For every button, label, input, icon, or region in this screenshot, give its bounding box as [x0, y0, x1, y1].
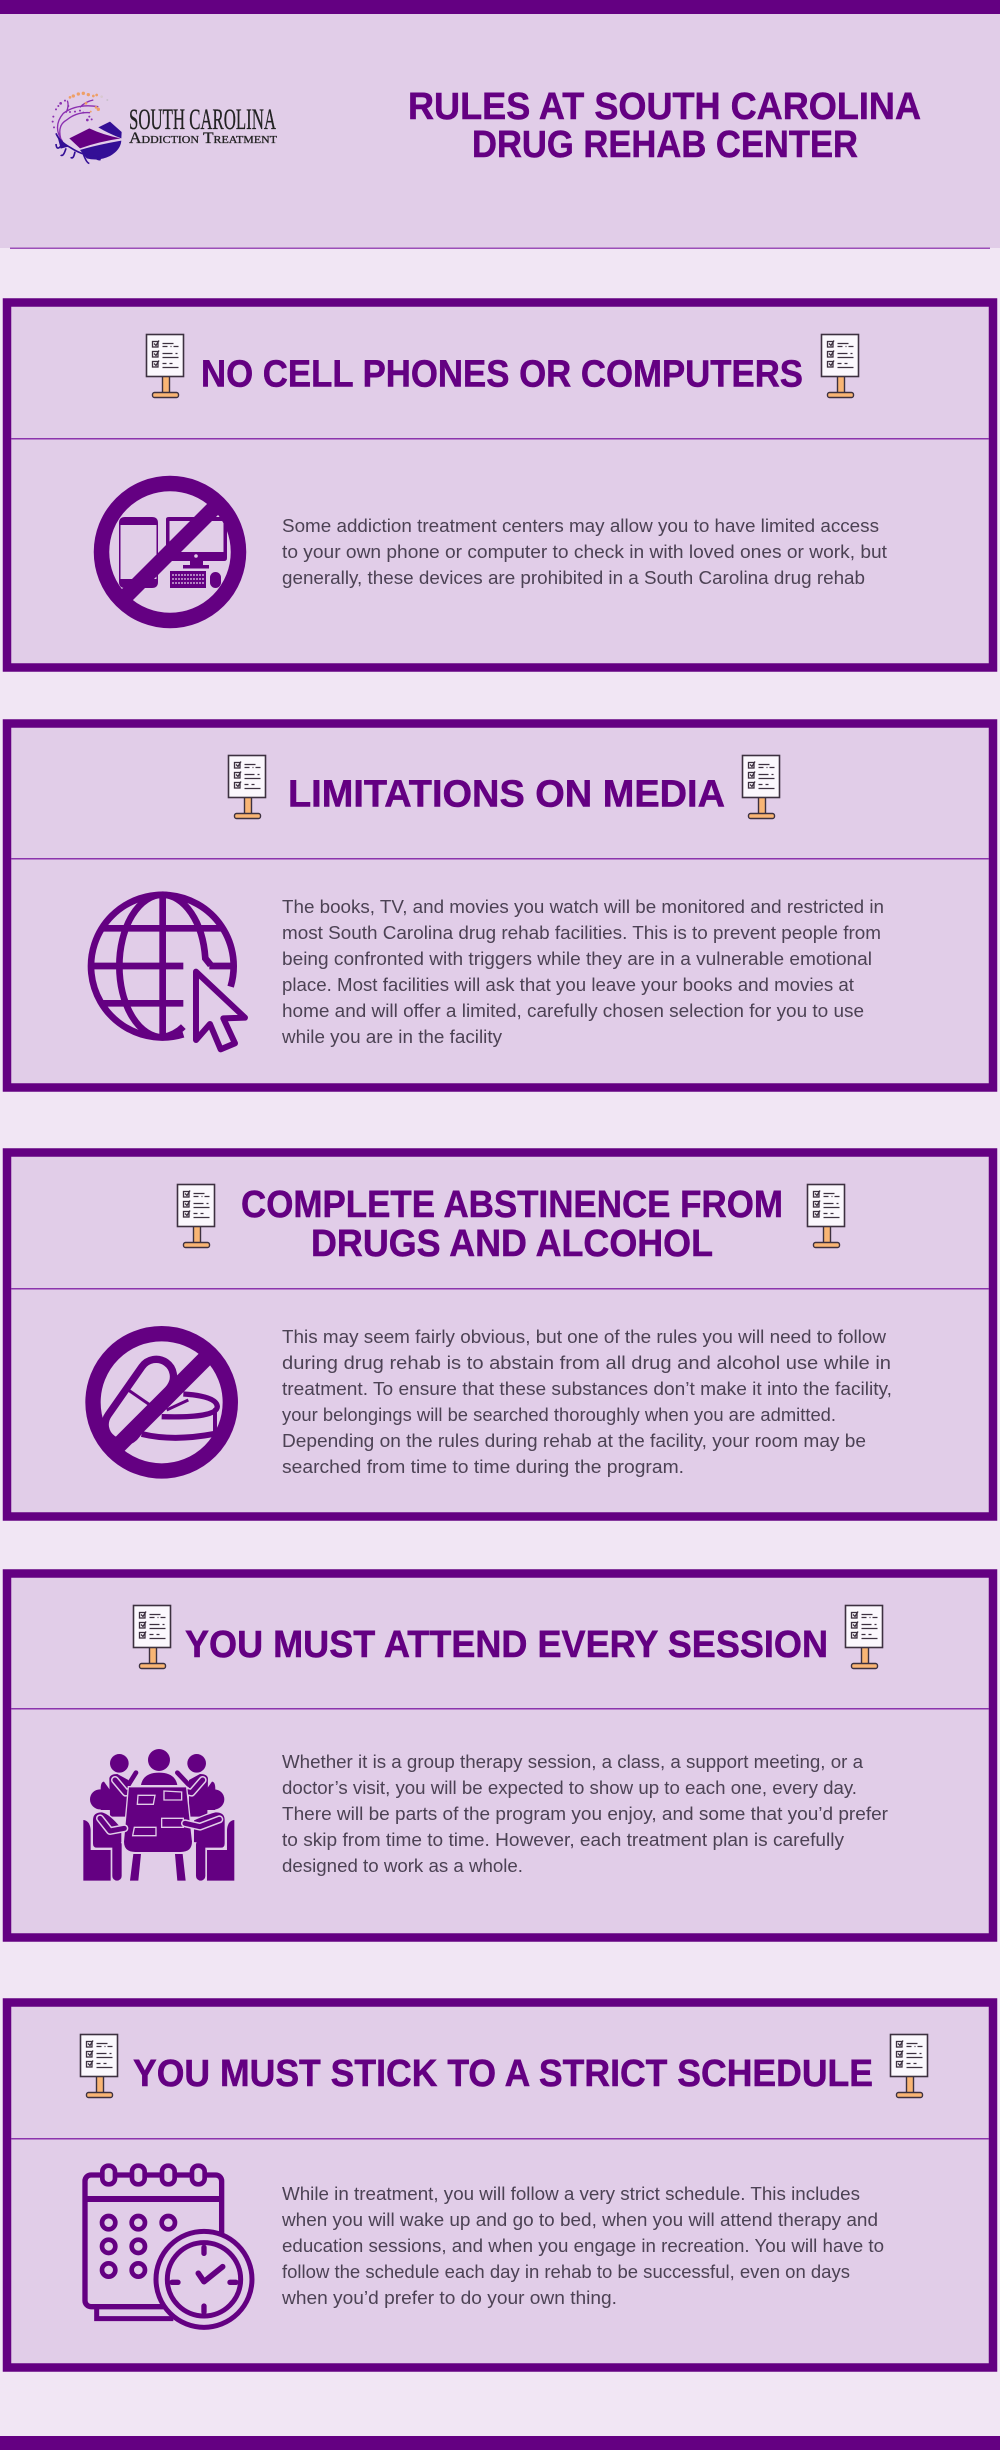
- body text: during drug rehab is to abstain from all drug and alcohol use while in: [282, 1352, 891, 1373]
- body text: The books, TV, and movies you watch will be monitored and restricted in: [282, 896, 884, 917]
- heading: COMPLETE ABSTINENCE FROM: [241, 1184, 783, 1226]
- header band: [0, 14, 1000, 249]
- icon: checklist right: [822, 334, 858, 398]
- panel: limitations on media: [7, 724, 993, 1088]
- body text: Whether it is a group therapy session, a class, a support meeting, or a: [282, 1751, 864, 1772]
- panel: attend every session: [7, 1574, 993, 1938]
- body text: when you will wake up and go to bed, when you will attend therapy and: [281, 2209, 878, 2230]
- body text: Some addiction treatment centers may allow you to have limited access: [282, 515, 879, 536]
- body text: While in treatment, you will follow a very strict schedule. This includes: [282, 2183, 860, 2204]
- icon: checklist left: [80, 2034, 118, 2098]
- heading: LIMITATIONS ON MEDIA: [288, 774, 725, 816]
- icon: no pills: [93, 1334, 230, 1471]
- body text: [282, 1326, 892, 1477]
- body text: [282, 1751, 888, 1876]
- icon: checklist right: [846, 1606, 882, 1668]
- body text: There will be parts of the program you enjoy, and some that you’d prefer: [282, 1803, 888, 1824]
- body text: follow the schedule each day in rehab to be successful, even on days: [282, 2261, 850, 2282]
- icon: checklist left: [146, 334, 184, 398]
- panel: no cell phones or computers: [7, 302, 993, 668]
- heading: YOU MUST STICK TO A STRICT SCHEDULE: [133, 2053, 873, 2095]
- top bar: [0, 0, 1000, 14]
- heading: YOU MUST ATTEND EVERY SESSION: [185, 1624, 828, 1666]
- panel: complete abstinence: [7, 1152, 993, 1516]
- body text: being confronted with triggers while they are in a vulnerable emotional: [282, 948, 872, 969]
- body text: This may seem fairly obvious, but one of the rules you will need to follow: [282, 1326, 887, 1347]
- body text: education sessions, and when you engage in recreation. You will have to: [282, 2235, 884, 2256]
- logo: [52, 92, 277, 163]
- body text: doctor’s visit, you will be expected to show up to each one, every day.: [282, 1777, 857, 1798]
- body text: when you’d prefer to do your own thing.: [281, 2287, 617, 2308]
- body text: most South Carolina drug rehab facilities. This is to prevent people from: [282, 922, 881, 943]
- main title: RULES AT SOUTH CAROLINA: [408, 86, 921, 128]
- body text: [281, 896, 884, 1047]
- logo wordmark: SOUTH CAROLINA: [129, 103, 276, 136]
- icon: people at meeting table: [83, 1749, 234, 1881]
- main title: [408, 86, 921, 166]
- main title: DRUG REHAB CENTER: [472, 124, 858, 166]
- heading: DRUGS AND ALCOHOL: [311, 1223, 713, 1265]
- panel: strict schedule: [7, 2002, 993, 2368]
- icon: checklist right: [808, 1184, 844, 1248]
- body text: home and will offer a limited, carefully chosen selection for you to use: [282, 1000, 864, 1021]
- body text: to your own phone or computer to check in with loved ones or work, but: [282, 541, 888, 562]
- logo wordmark: [129, 103, 277, 147]
- body text: while you are in the facility: [281, 1026, 503, 1047]
- body text: designed to work as a whole.: [282, 1855, 523, 1876]
- body text: Depending on the rules during rehab at the facility, your room may be: [282, 1430, 866, 1451]
- icon: calendar with clock: [85, 2166, 252, 2327]
- body text: place. Most facilities will ask that you leave your books and movies at: [282, 974, 855, 995]
- icon: checklist right: [890, 2034, 928, 2098]
- icon: no devices: [102, 484, 238, 620]
- body text: [281, 2183, 884, 2308]
- icon: globe with cursor: [91, 895, 245, 1049]
- icon: checklist left: [178, 1184, 214, 1248]
- body text: to skip from time to time. However, each treatment plan is carefully: [282, 1829, 845, 1850]
- logo wordmark: Addiction Treatment: [129, 130, 277, 147]
- body text: your belongings will be searched thoroughly when you are admitted.: [282, 1404, 836, 1425]
- icon: checklist left: [228, 756, 266, 818]
- body text: treatment. To ensure that these substances don’t make it into the facility,: [282, 1378, 892, 1399]
- heading: NO CELL PHONES OR COMPUTERS: [201, 354, 803, 396]
- body text: searched from time to time during the program.: [282, 1456, 684, 1477]
- body text: [282, 515, 888, 588]
- icon: checklist left: [134, 1606, 170, 1668]
- footer bar: [0, 2436, 1000, 2450]
- logo mountains: [98, 122, 122, 138]
- icon: checklist right: [742, 756, 780, 818]
- heading: [241, 1184, 783, 1265]
- body text: generally, these devices are prohibited in a South Carolina drug rehab: [282, 567, 865, 588]
